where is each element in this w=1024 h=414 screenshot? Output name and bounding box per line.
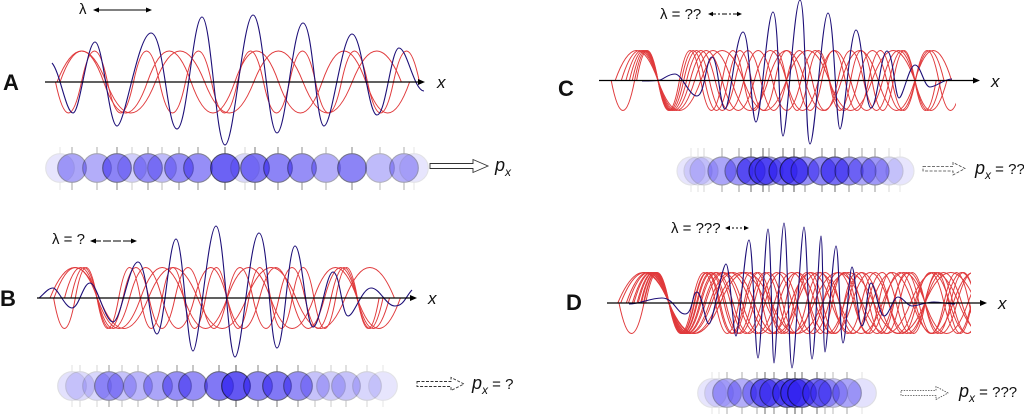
- bead row C: [677, 148, 914, 192]
- panel D: [566, 220, 1017, 414]
- label D: D: [566, 290, 582, 315]
- x label B: x: [427, 289, 437, 308]
- label C: C: [558, 76, 574, 101]
- wavelength annotation C: λ = ??: [660, 6, 701, 23]
- momentum label D: p: [958, 381, 969, 401]
- label A: A: [3, 70, 19, 95]
- wavelength annotation A: [79, 1, 152, 18]
- blue wave packet A: [52, 15, 424, 145]
- wavelength annotation C: [660, 6, 742, 23]
- red component waves C: [611, 50, 962, 110]
- bead row D: [698, 372, 876, 414]
- blue wave packet B: [39, 226, 412, 357]
- momentum label C: x: [984, 168, 992, 182]
- panel C: [558, 0, 1024, 192]
- momentum label B: p: [471, 373, 482, 393]
- blue wave packet C: [642, 0, 952, 144]
- momentum label D: x: [968, 391, 976, 405]
- x axis B: [37, 295, 417, 301]
- wavelength annotation D: λ = ???: [671, 220, 721, 237]
- momentum label C: p: [974, 158, 985, 178]
- panel A: [3, 1, 512, 190]
- momentum arrow D: [901, 386, 948, 400]
- red component waves A: [56, 51, 420, 113]
- momentum label D: = ???: [975, 384, 1017, 401]
- x label C: x: [990, 72, 1000, 91]
- wavelength annotation A: λ: [79, 1, 87, 18]
- bead row B: [58, 365, 397, 407]
- momentum label A: x: [504, 165, 512, 179]
- wavelength annotation B: λ = ?: [52, 231, 85, 248]
- panel B: [0, 226, 513, 407]
- momentum label B: x: [481, 383, 489, 397]
- momentum arrow A: [430, 160, 488, 172]
- momentum label A: p: [494, 155, 505, 175]
- red component waves B: [50, 268, 400, 328]
- wavelength annotation B: [52, 231, 137, 248]
- momentum label C: = ??: [991, 161, 1024, 178]
- momentum arrow C: [923, 162, 965, 175]
- momentum label B: = ?: [488, 376, 513, 393]
- bead row A: [46, 147, 428, 190]
- x axis C: [599, 78, 980, 84]
- x axis D: [607, 300, 987, 306]
- x label D: x: [997, 294, 1007, 313]
- blue wave packet D: [629, 223, 955, 368]
- x label A: x: [436, 73, 446, 92]
- red component waves D: [618, 272, 1011, 334]
- label B: B: [0, 286, 16, 311]
- x axis A: [45, 79, 425, 85]
- wavelength annotation D: [671, 220, 749, 237]
- momentum arrow B: [417, 378, 464, 390]
